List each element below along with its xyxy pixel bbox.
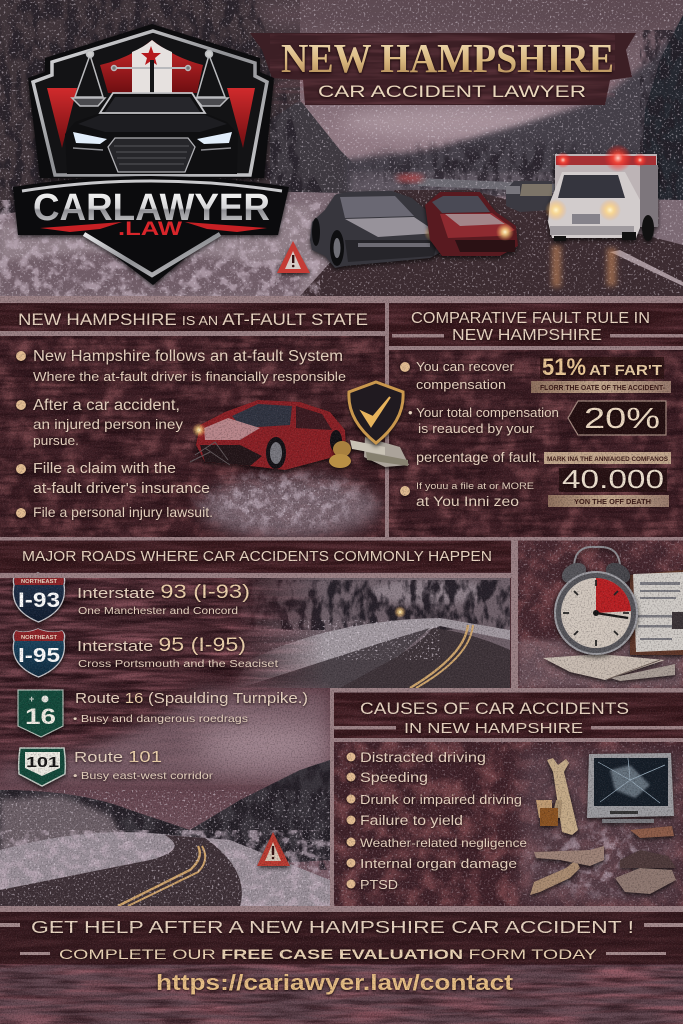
list of causes: Internal organ damage — [360, 856, 517, 871]
icon: warning triangle — [257, 832, 290, 866]
heading — [334, 693, 683, 738]
icon: case papers — [630, 570, 683, 655]
upper road scene — [230, 578, 510, 688]
bullet: at-fault system: Where the at-fault driver is financially responsible — [33, 369, 346, 384]
lower road scene — [0, 690, 335, 906]
road label: Interstate 93: Interstate 93 (I-93) — [77, 582, 250, 603]
bullet: recover compensation: compensation — [416, 377, 506, 392]
dark crashed car — [310, 191, 448, 268]
small cars in distance — [506, 181, 552, 212]
list of causes: Distracted driving — [360, 750, 486, 765]
red crashed car — [425, 192, 518, 256]
scales of justice — [72, 50, 228, 106]
sign: I-95: NORTHEAST — [21, 635, 58, 641]
list of causes: Failure to yield — [360, 813, 463, 828]
road label: Route 16: Route 16 (Spaulding Turnpike.) — [75, 691, 308, 707]
icon: check shield — [349, 382, 403, 443]
list of causes: Speeding — [360, 770, 428, 785]
CTA headline: GET HELP AFTER A NEW HAMPSHIRE CAR ACCIDENT ! — [31, 917, 634, 937]
name banner: CARLAWYER — [33, 187, 270, 229]
sign: Route 101 — [19, 748, 65, 786]
heading: COMPARATIVE FAULT RULE IN — [411, 310, 650, 327]
icon: crossed bones and whiskey — [536, 758, 578, 835]
left dark maroon texture — [0, 578, 320, 785]
road label: Interstate 95: Interstate 95 (I-95) — [77, 635, 246, 656]
road reflections — [552, 245, 616, 287]
icon: alarm clock — [555, 547, 637, 654]
list of causes: Weather-related negligence — [360, 836, 527, 850]
icon: bones and debris — [530, 826, 676, 895]
bullet: recover compensation — [400, 359, 515, 392]
sign: I-95 — [13, 629, 65, 677]
panel: at-fault state — [0, 296, 385, 538]
shield — [28, 24, 274, 178]
heading ribbon: MAJOR ROADS WHERE CAR ACCIDENTS COMMONLY HAPPEN — [22, 549, 492, 565]
stat: 51 percent — [540, 354, 664, 381]
bullet: file a claim: Fille a claim with the — [33, 460, 176, 477]
sign: Route 16: 16 — [25, 704, 56, 729]
road label: Route 101: • Busy east-west corridor — [73, 770, 214, 782]
black car front — [65, 93, 238, 174]
road label: Route 16 — [73, 691, 308, 725]
film grain overlay — [0, 296, 683, 1024]
name banner — [13, 176, 289, 285]
label bar 3 — [548, 495, 669, 507]
bullet: total compensation reduced — [408, 405, 559, 465]
icon: cracked monitor — [587, 753, 674, 823]
road label: Route 101 — [73, 749, 214, 782]
sign: I-93: I-93 — [18, 589, 60, 612]
panel: major roads — [0, 540, 513, 906]
icon: envelopes — [543, 654, 675, 681]
title text: NEW HAMPSHIRE — [281, 35, 614, 81]
list of causes: Drunk or impaired driving — [360, 792, 522, 807]
road label: Interstate 95: Cross Portsmouth and the Seaciset — [78, 659, 278, 670]
bullet: at-fault system — [16, 348, 346, 384]
panel: causes of accidents — [334, 692, 683, 906]
heading ribbon — [0, 304, 385, 331]
sign: I-95: I-95 — [18, 645, 60, 667]
title banner — [250, 33, 636, 105]
bullet: lawsuit: File a personal injury lawsuit. — [33, 504, 213, 520]
name banner: .LAW — [118, 219, 182, 240]
road label: Route 16: • Busy and dangerous roedrags — [73, 713, 248, 725]
sign: Route 16: + — [29, 694, 34, 704]
heading ribbon: NEW HAMPSHIRE IS AN AT-FAULT STATE — [18, 310, 368, 329]
label bar 2: MARK INA THE ANNIAIGED COMFANOS — [547, 456, 669, 463]
list of causes: PTSD — [360, 877, 398, 892]
bullet: fifty one or more — [400, 481, 534, 509]
sign: I-93: NORTHEAST — [21, 579, 58, 585]
bullet: file a claim: at-fault driver's insurance — [33, 480, 210, 497]
icon: money and coins — [329, 437, 409, 468]
stat: 20 percent: 20% — [584, 403, 660, 435]
bullet: fifty one or more: If youu a file at or MORE — [416, 481, 534, 492]
bullet: file a claim — [16, 460, 210, 497]
road label: Interstate 95 — [77, 635, 278, 670]
stat: 20 percent — [568, 401, 666, 435]
bullet: fifty one or more: at You Inni zeo — [416, 494, 519, 509]
heading: NEW HAMPSHIRE — [452, 327, 602, 344]
subtitle: CAR ACCIDENT LAWYER — [318, 83, 586, 101]
stat: 40,000: 40.000 — [562, 464, 664, 494]
sign: Route 101: 101 — [26, 754, 59, 771]
bullet: total compensation reduced: is reauced by your — [418, 421, 535, 436]
label bar 3: YON THE OFF DEATH — [574, 499, 651, 506]
heading: CAUSES OF CAR ACCIDENTS — [360, 700, 629, 718]
sign: Route 16 — [18, 690, 63, 737]
CTA line dashes — [0, 923, 683, 955]
label bar 1 — [531, 381, 671, 393]
icon: wrecked red car — [190, 400, 346, 470]
road label: Interstate 93 — [77, 582, 250, 617]
bullet: after an accident: an injured person iney — [33, 416, 183, 432]
panel: comparative fault — [388, 296, 683, 538]
label bar 1: FLORR THE OATE OF THE ACCIDENT- — [540, 385, 666, 392]
heading: IN NEW HAMPSHIRE — [404, 720, 583, 737]
heading — [388, 304, 683, 346]
CTA url: https://cariawyer.law/contact — [156, 970, 514, 995]
road label: Interstate 93: One Manchester and Concord — [78, 606, 238, 617]
bullet: total compensation reduced: percentage of fault. — [416, 449, 540, 465]
list of causes — [346, 750, 527, 892]
road label: Route 101: Route 101 — [74, 749, 162, 766]
title ribbon shapes — [250, 33, 636, 105]
bullet: after an accident: pursue. — [33, 433, 79, 448]
ambulance — [545, 144, 658, 241]
panel: call to action — [0, 912, 683, 1024]
bullet: after an accident: After a car accident, — [33, 397, 180, 414]
bullet: recover compensation: You can recover — [416, 359, 515, 374]
logo badge — [13, 24, 289, 285]
panel: clock and documents — [518, 540, 683, 688]
bullet: after an accident — [16, 397, 183, 448]
heading ribbon — [0, 541, 511, 572]
stat: 51 percent: AT FAR'T — [589, 362, 662, 379]
bullet: at-fault system: New Hampshire follows an at-fault System — [33, 348, 343, 365]
label bar 2 — [544, 452, 671, 464]
bullet: total compensation reduced: • Your total compensation — [408, 405, 559, 420]
sign: I-93 — [13, 573, 65, 622]
warning triangle — [277, 241, 310, 273]
CTA subline: COMPLETE OUR FREE CASE EVALUATION FORM TODAY — [59, 946, 598, 962]
header snowy highway scene — [0, 0, 683, 296]
stat: 51 percent: 51% — [542, 354, 586, 381]
